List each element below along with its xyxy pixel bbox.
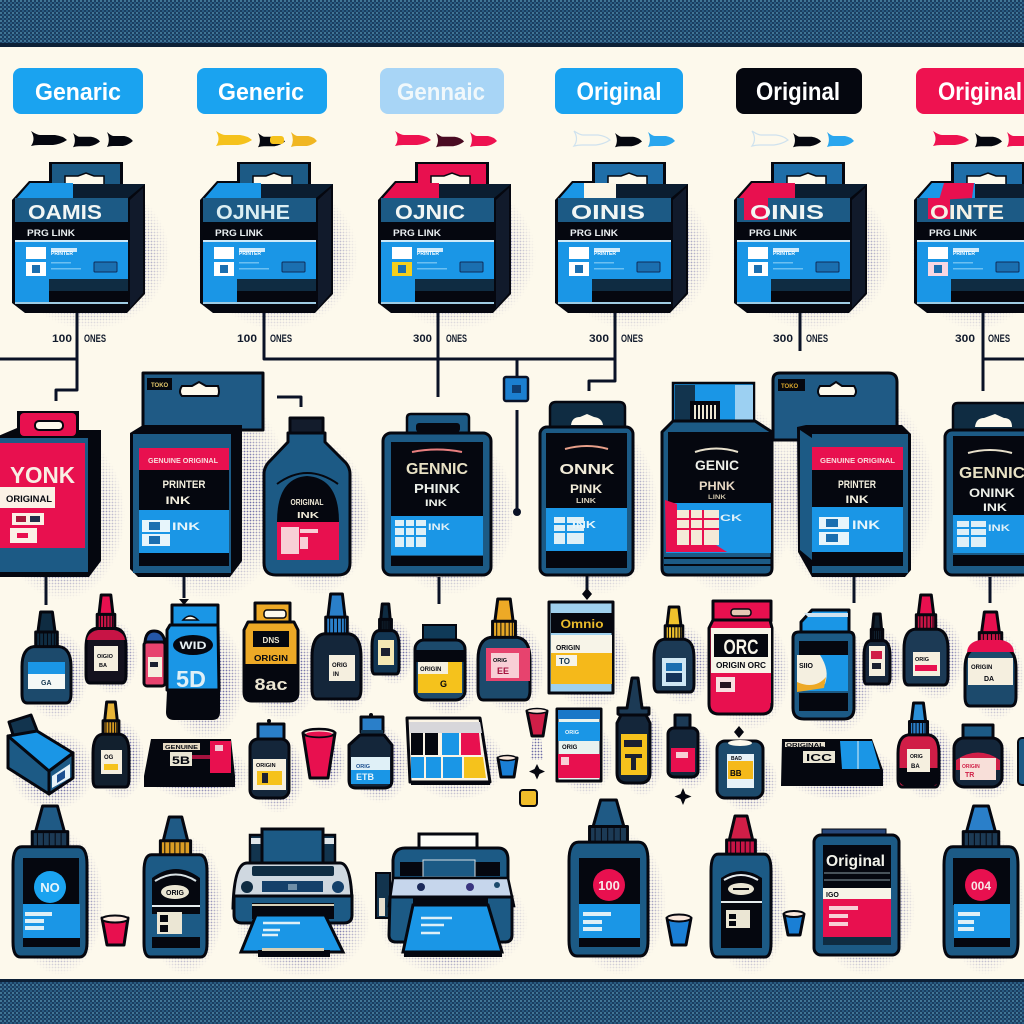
printer left xyxy=(233,829,352,957)
column label: Generic 3: Gennaic xyxy=(397,79,485,106)
bottle blue ribbed cap xyxy=(250,719,289,798)
bottle yellow cap magenta label: ORIG xyxy=(493,658,507,664)
small pink bottle xyxy=(144,631,165,686)
yellow/black carton Omnio xyxy=(549,602,613,693)
connector diamond and jar: BB xyxy=(730,769,742,778)
hanging pack box right: INK xyxy=(852,518,880,532)
jar red label: TR xyxy=(965,772,974,779)
small supplies row 1 xyxy=(22,594,1016,720)
column label: Generic 3 xyxy=(380,68,504,114)
comparison chart card xyxy=(407,718,490,785)
halftone drop shadows xyxy=(0,180,1024,977)
jar red label xyxy=(954,725,1002,787)
yield labels: ONES xyxy=(270,333,292,345)
connector diamond and jar xyxy=(717,716,763,798)
large bottle NO blue xyxy=(13,806,87,957)
yield labels: ONES xyxy=(806,333,828,345)
ink box 6: PRG LINK xyxy=(929,228,978,238)
hanging pack box right: INK xyxy=(846,494,869,506)
cartridge GENIC with magenta wedge: LINK xyxy=(708,495,727,501)
ink box 5: PRG LINK xyxy=(749,228,798,238)
teal carton: SIIO xyxy=(799,663,814,670)
cartridge GENNIC xyxy=(383,414,491,575)
column label: Generic 1: Genaric xyxy=(35,79,121,106)
ink box 6: PRINTER xyxy=(953,251,975,257)
large refill bottle: INK xyxy=(297,511,319,520)
ink box 5: PRINTER xyxy=(773,251,795,257)
blue cup 1 xyxy=(667,914,691,945)
ink box 2: PRINTER xyxy=(239,251,261,257)
yield labels: ONES xyxy=(988,333,1010,345)
bottle blue nozzle red body: ORIG xyxy=(910,754,923,760)
bottom halftone band xyxy=(0,979,1024,1024)
bottle magenta cap xyxy=(904,595,948,685)
cartridge ONNK: INK xyxy=(572,520,597,531)
flat black carton: GENUINE xyxy=(165,745,198,751)
edge item xyxy=(1018,738,1024,785)
carton blue magenta xyxy=(557,709,601,781)
ink box 3: PRINTER xyxy=(417,251,439,257)
yellow label jar: G xyxy=(440,679,447,689)
cartridge ONNK: ONNK xyxy=(560,461,615,478)
tilted blue cartridge box xyxy=(8,715,73,794)
bottle blue cap: ORIG xyxy=(332,663,348,669)
cartridge GENNIC: GENNIC xyxy=(406,461,468,478)
bottle yellow collar: OG xyxy=(104,755,114,761)
Original carton: IGO xyxy=(826,892,839,899)
bottle yellow cap magenta label: EE xyxy=(497,666,509,676)
jar red label: ORIGIN xyxy=(962,764,980,770)
ink box 2: OJNHE xyxy=(216,202,290,224)
large bottle yellow collar: ORIG xyxy=(166,890,184,897)
ink box 4: PRINTER xyxy=(594,251,616,257)
column label: Original 3 xyxy=(916,68,1024,114)
yield labels xyxy=(52,333,1010,345)
hanging pack box right: PRINTER xyxy=(838,479,876,491)
carton blue magenta: ORIG xyxy=(562,745,578,751)
cartridge GENIC with magenta wedge: PHNK xyxy=(699,479,735,493)
yellow box xyxy=(244,603,298,701)
cartridge GENIC with magenta wedge: GENIC xyxy=(695,457,739,473)
small supplies row 2 xyxy=(8,678,1024,806)
bottle blue ribbed cap: ORIGIN xyxy=(256,763,276,769)
hanging pack with printer ink box xyxy=(130,373,263,577)
large bottle 6 red dot: 100 xyxy=(598,878,620,893)
magenta box YONK: YONK xyxy=(10,462,75,488)
ink box 6: OINTE xyxy=(930,202,1004,224)
yellow/black carton Omnio: TO xyxy=(559,657,570,666)
yield labels: 300 xyxy=(773,333,793,345)
bottle black cap: GA xyxy=(41,680,52,687)
yellow label jar xyxy=(415,625,465,700)
Original carton xyxy=(814,829,899,955)
ink box 1: OAMIS xyxy=(28,202,102,224)
flat carton blue: ORIGINAL xyxy=(786,743,824,749)
yellow box: DNS xyxy=(263,636,280,645)
column label: Generic 1 xyxy=(13,68,143,114)
tiny bottle red label xyxy=(864,614,890,684)
large bottle right red dot: 004 xyxy=(971,879,991,893)
small connector chip icon xyxy=(504,377,528,401)
Original carton: Original xyxy=(826,853,885,870)
bottle red cap xyxy=(86,595,126,683)
yield labels: 100 xyxy=(237,333,257,345)
blue box SD: 5D xyxy=(176,666,206,692)
jar magenta cap: DA xyxy=(984,676,994,683)
hanging pack with printer ink box: INK xyxy=(166,495,191,507)
large bottle red nozzle xyxy=(711,816,771,957)
flat black carton: 5B xyxy=(172,755,190,767)
ink box 4: OINIS xyxy=(571,202,645,224)
cartridge GENIC with magenta wedge xyxy=(662,383,772,575)
bottle magenta cap: ORIG xyxy=(915,657,929,663)
bottle blue nozzle red body xyxy=(898,703,939,787)
bottle blue cap xyxy=(312,594,361,699)
small blue cup xyxy=(498,756,517,777)
flat carton blue: ICC xyxy=(806,753,832,764)
bottle yellow cap magenta label xyxy=(478,599,530,700)
column label: Generic 2 xyxy=(197,68,327,114)
yield labels: 100 xyxy=(52,333,72,345)
cartridge ONNK: PINK xyxy=(570,482,602,496)
column label: Original 1: Original xyxy=(576,78,662,106)
red cup with drip xyxy=(527,708,547,760)
ink box 3 xyxy=(378,162,511,313)
magenta box YONK: ORIGINAL xyxy=(6,494,52,505)
yellow box: 8ac xyxy=(254,675,288,694)
connector lines xyxy=(0,313,1024,605)
yellow ink chip xyxy=(520,790,537,806)
yield labels: ONES xyxy=(84,333,106,345)
hanging pack box right: GENUINE ORIGINAL xyxy=(820,456,895,465)
hanging pack with printer ink box: INK xyxy=(172,521,200,533)
yellow box: ORIGIN xyxy=(254,654,288,663)
large bottle NO blue: NO xyxy=(40,880,60,895)
tiny bottle xyxy=(372,604,399,674)
ink box 5 xyxy=(734,162,867,313)
large bottle 6 red dot xyxy=(569,800,648,956)
bottle yellow collar xyxy=(93,702,129,787)
tall yellow label bottle xyxy=(617,678,650,783)
yield labels: 300 xyxy=(955,333,975,345)
jar blue cap xyxy=(349,713,392,788)
cartridge GENNIC right edge xyxy=(945,403,1024,575)
magenta carton ORC: ORC xyxy=(724,636,758,659)
carton blue magenta: ORIG xyxy=(565,730,579,736)
column label: Original 1 xyxy=(555,68,683,114)
small red label bottle xyxy=(668,715,698,777)
blue box SD xyxy=(166,605,220,720)
yellow label jar: ORIGIN xyxy=(420,667,441,673)
ink box 3: PRG LINK xyxy=(393,228,442,238)
cartridge GENNIC: INK xyxy=(425,498,448,508)
ink box 4 xyxy=(555,162,688,313)
arrow marks row xyxy=(31,131,1024,147)
yield labels: 300 xyxy=(413,333,432,345)
column label: Generic 2: Generic xyxy=(218,79,304,106)
flat carton blue xyxy=(781,739,883,786)
blue cup 2 xyxy=(784,911,804,935)
hanging pack with printer ink box: TOKO xyxy=(151,383,169,389)
hanging pack with printer ink box: GENUINE ORIGINAL xyxy=(148,456,218,465)
cartridge GENNIC right edge: ONINK xyxy=(969,486,1015,500)
red cup 2 xyxy=(102,916,128,945)
bottle red cap: OIGIO xyxy=(97,654,114,660)
ink box 2 xyxy=(200,162,333,313)
teal carton xyxy=(793,610,854,719)
ink box 1: PRINTER xyxy=(51,251,73,257)
column label: Original 2 xyxy=(736,68,862,114)
large refill bottle xyxy=(264,418,350,575)
hanging pack box right xyxy=(773,373,911,577)
yield labels: ONES xyxy=(621,333,643,345)
bottle red cap: BA xyxy=(99,663,107,669)
cartridge ONNK xyxy=(540,402,633,575)
flat black carton xyxy=(144,739,235,787)
yield labels: 300 xyxy=(589,333,609,345)
jar magenta cap xyxy=(965,612,1016,706)
cartridge ONNK: LINK xyxy=(576,498,596,505)
bottle black cap xyxy=(22,612,71,703)
magenta carton ORC: ORIGIN ORC xyxy=(716,661,766,670)
large bottle yellow collar xyxy=(144,817,207,957)
ink box 6 xyxy=(914,162,1024,313)
top halftone band xyxy=(0,0,1024,47)
magenta box YONK xyxy=(0,411,101,577)
jar blue cap: ORIG xyxy=(356,764,370,770)
large bottle right red dot xyxy=(944,806,1018,957)
ink box 5: OINIS xyxy=(750,202,824,224)
red ink cup xyxy=(303,729,335,778)
blue box SD: WID xyxy=(180,640,207,652)
yield labels: ONES xyxy=(446,333,467,345)
ink box 1: PRG LINK xyxy=(27,228,76,238)
yellow/black carton Omnio: ORIGIN xyxy=(556,645,580,652)
ink box 4: PRG LINK xyxy=(570,228,619,238)
cartridge GENNIC: INK xyxy=(428,522,451,532)
cartridge GENNIC right edge: INK xyxy=(988,523,1011,533)
star marker xyxy=(529,764,545,780)
ink box 1 xyxy=(12,162,145,313)
bottle blue nozzle red body: BA xyxy=(911,764,920,770)
connector diamond and jar: BAD xyxy=(731,756,742,762)
ink box 3: OJNIC xyxy=(395,202,465,224)
jar blue cap: ETB xyxy=(356,772,375,782)
hanging pack box right: TOKO xyxy=(781,384,799,390)
yellow/black carton Omnio: Omnio xyxy=(560,617,604,631)
ink box 2: PRG LINK xyxy=(215,228,264,238)
small bottle yellow cap xyxy=(654,607,694,692)
cartridge GENNIC right edge: INK xyxy=(983,502,1007,514)
jar magenta cap: ORIGIN xyxy=(971,665,992,671)
printer right xyxy=(376,834,514,957)
second star marker xyxy=(674,788,692,805)
cartridge GENNIC: PHINK xyxy=(414,481,461,496)
bottle blue cap: IN xyxy=(333,672,339,678)
magenta carton ORC xyxy=(709,601,772,714)
cartridge GENIC with magenta wedge: CK xyxy=(720,513,743,523)
column label: Original 2: Original xyxy=(756,78,840,106)
hanging pack with printer ink box: PRINTER xyxy=(162,479,206,491)
large refill bottle: ORIGINAL xyxy=(290,498,324,507)
cartridge GENNIC right edge: GENNIC xyxy=(959,465,1024,482)
